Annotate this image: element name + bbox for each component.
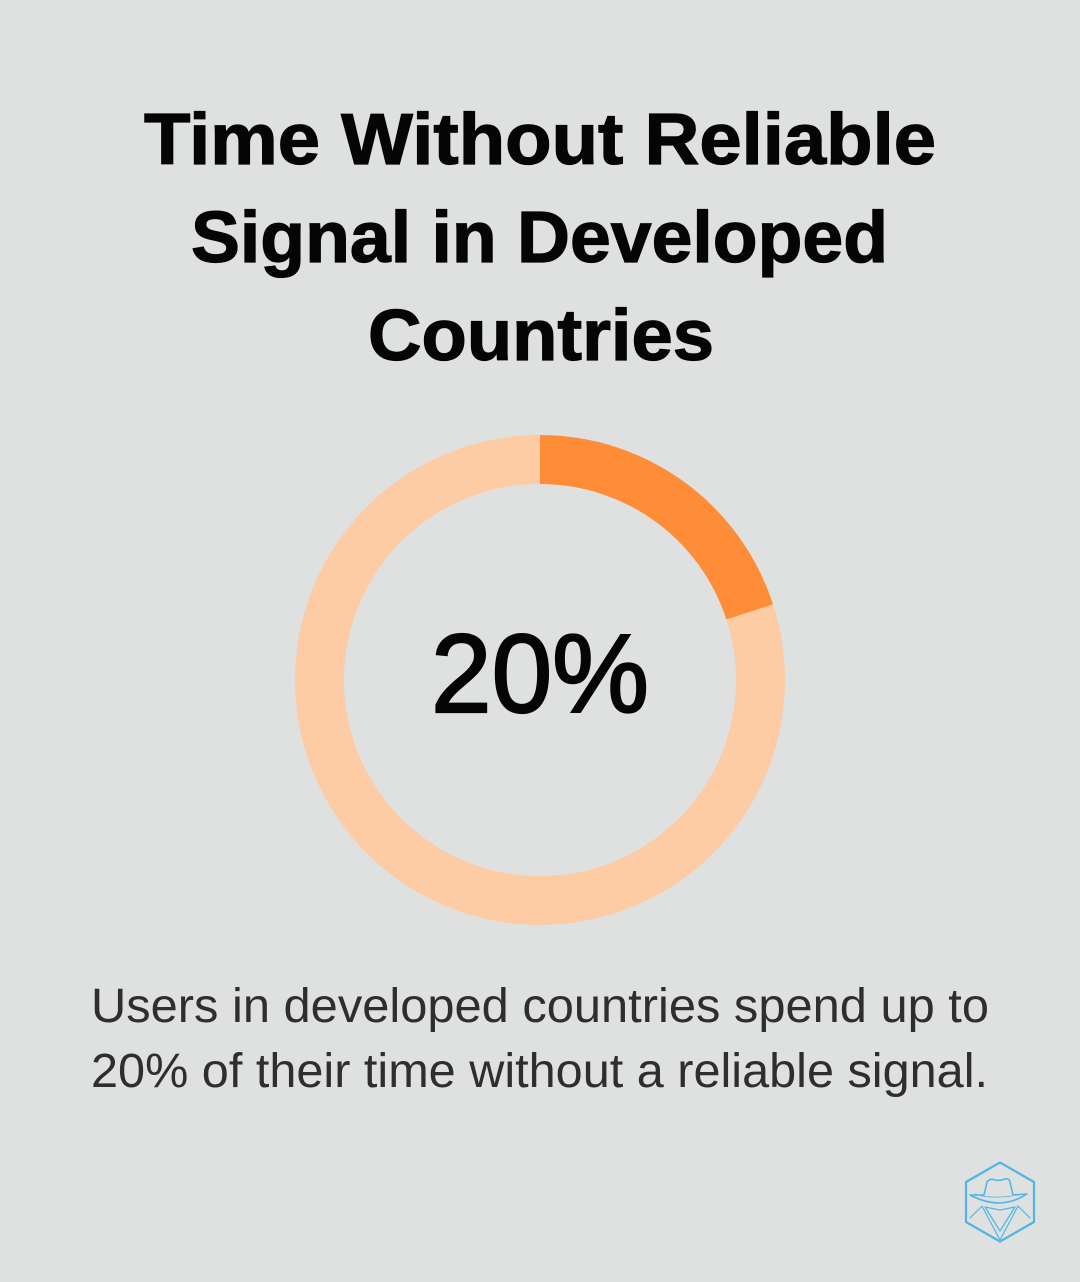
title: Time Without Reliable: [144, 100, 936, 180]
donut value: 20%: [431, 612, 649, 736]
icon: logo hexagon with spy hat: [966, 1162, 1034, 1242]
donut chart: 20%: [320, 435, 773, 900]
description text: [91, 980, 989, 1098]
title: [144, 100, 936, 376]
description text: Users in developed countries spend up to: [91, 980, 989, 1033]
title: Countries: [368, 296, 714, 376]
description text: 20% of their time without a reliable signal.: [91, 1045, 988, 1098]
title: Signal in Developed: [191, 198, 888, 278]
